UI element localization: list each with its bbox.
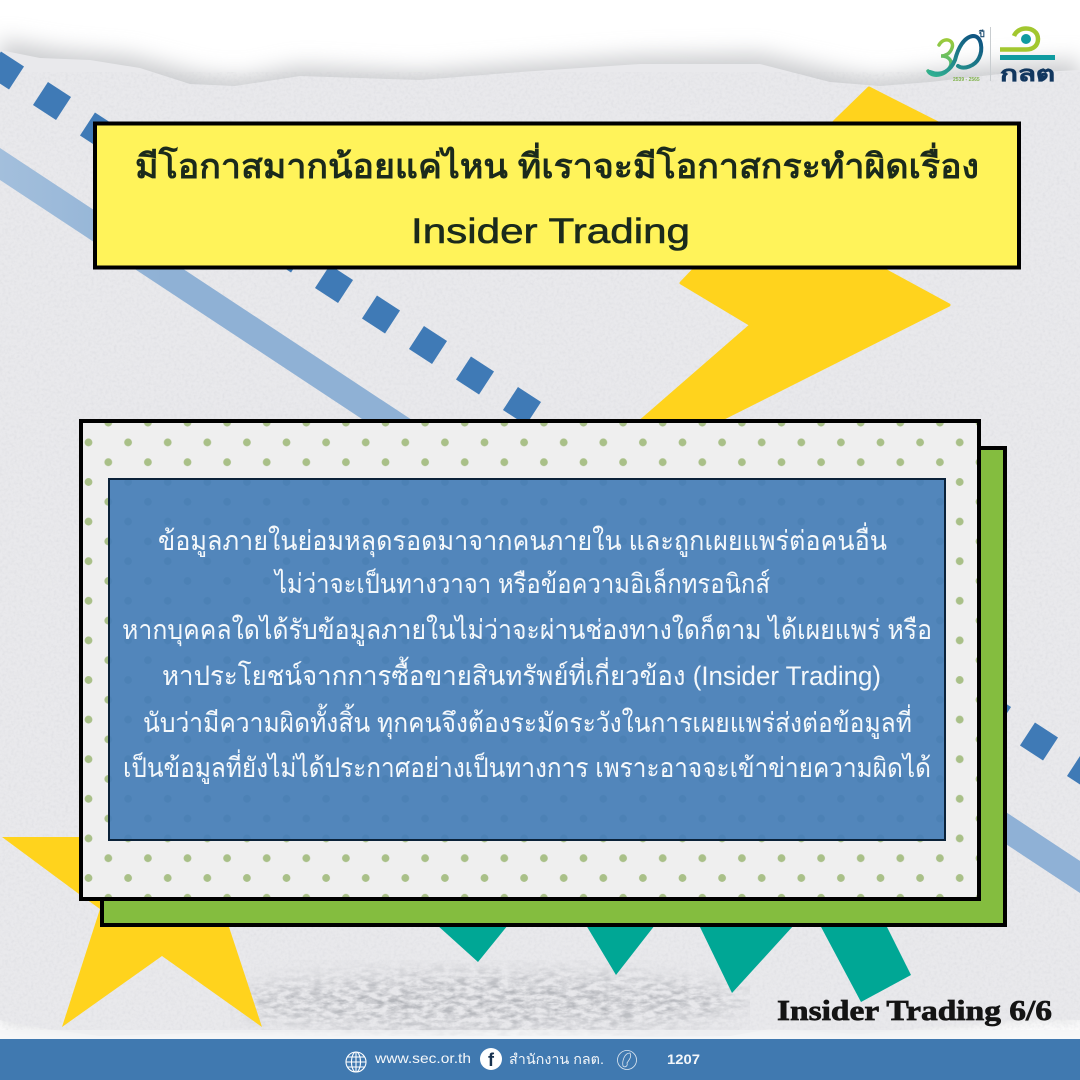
logo: 30th anniversary: ปี <box>978 29 985 39</box>
logo: 30th anniversary <box>928 29 985 83</box>
body text <box>122 522 932 784</box>
blue text panel <box>109 479 945 840</box>
title box <box>95 124 1019 268</box>
logo: 30th anniversary: 2539 - 2565 <box>953 77 980 83</box>
body text: เป็นข้อมูลที่ยังไม่ได้ประกาศอย่างเป็นทางการ เพราะอาจจะเข้าข่ายความผิดได้ <box>123 749 931 784</box>
icon: facebook <box>480 1048 502 1070</box>
logo divider <box>990 27 991 81</box>
teal bunting flags <box>437 925 911 1002</box>
body text: นับว่ามีความผิดทั้งสิ้น ทุกคนจึงต้องระมัดระวังในการเผยแพร่ส่งต่อข้อมูลที่ <box>143 703 912 740</box>
title text: Insider Trading <box>411 212 690 251</box>
body text: หากบุคคลใดได้รับข้อมูลภายในไม่ว่าจะผ่านช่องทางใดก็ตาม ได้เผยแพร่ หรือ <box>122 612 932 647</box>
icon: facebook: f <box>488 1050 495 1070</box>
title text: มีโอกาสมากน้อยแค่ไหน ที่เราจะมีโอกาสกระทำผิดเรื่อง <box>135 142 979 186</box>
website: www.sec.or.th <box>374 1050 471 1066</box>
logo: SEC: กลต <box>1000 63 1055 86</box>
dotted content panel <box>81 421 979 899</box>
icon: phone <box>618 1050 636 1070</box>
body text: ข้อมูลภายในย่อมหลุดรอดมาจากคนภายใน และถูกเผยแพร่ต่อคนอื่น <box>158 522 887 558</box>
dashed blue diagonal line <box>0 51 1080 791</box>
yellow lightning bolt <box>636 88 949 425</box>
facebook name: สำนักงาน กลต. <box>509 1051 604 1067</box>
body text: หาประโยชน์จากการซื้อขายสินทรัพย์ที่เกี่ยวข้อง (Insider Trading) <box>162 656 881 691</box>
body text: ไม่ว่าจะเป็นทางวาจา หรือข้อความอิเล็กทรอนิกส์ <box>273 566 770 599</box>
footer bar <box>0 1039 1080 1080</box>
icon: globe <box>346 1052 366 1072</box>
series label: Insider Trading 6/6 <box>777 996 1052 1027</box>
green offset panel <box>102 448 1005 925</box>
yellow star <box>2 837 262 1027</box>
light blue diagonal stripe <box>0 148 1080 893</box>
phone number: 1207 <box>667 1052 700 1067</box>
logo: SEC <box>1000 28 1055 86</box>
title text <box>135 142 979 251</box>
